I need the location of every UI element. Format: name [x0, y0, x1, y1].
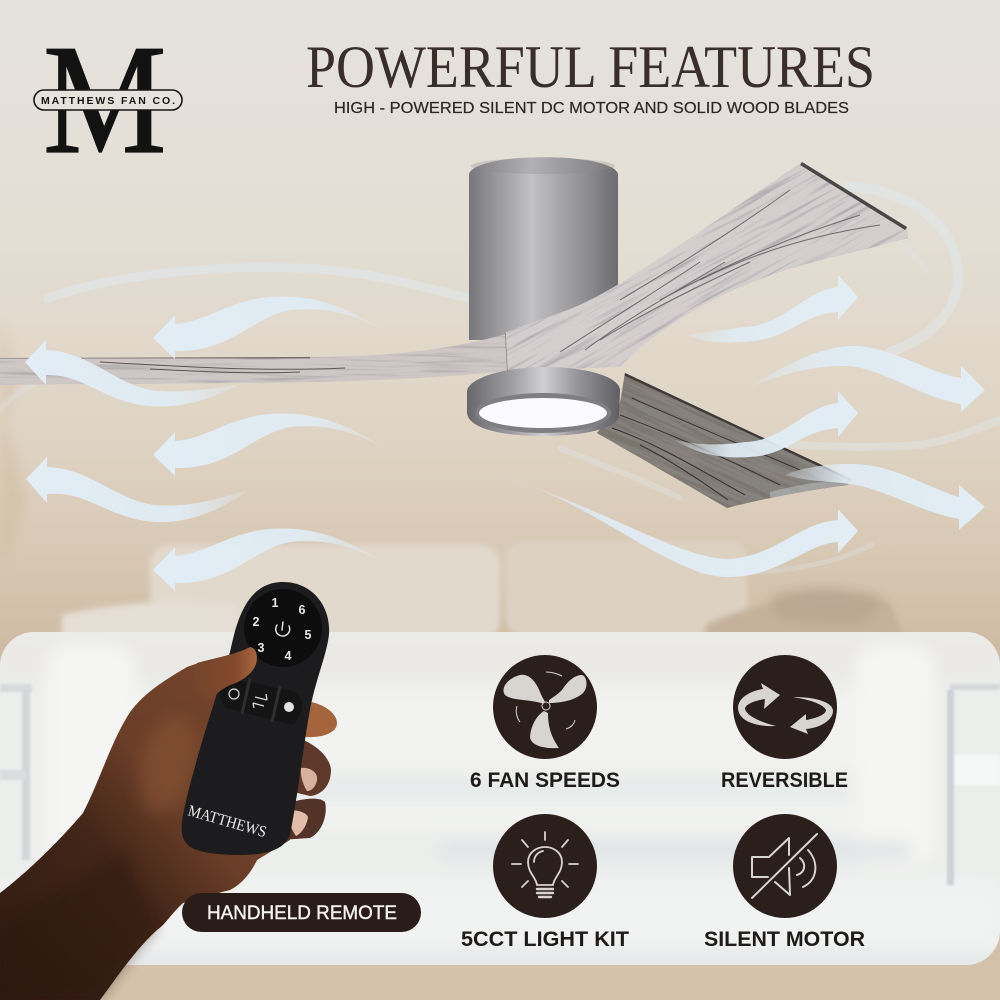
air arrow left 3 [153, 414, 382, 476]
air arrow right 4 [750, 346, 985, 412]
feature: reversible [721, 655, 848, 792]
ceiling fan [0, 44, 1000, 623]
hand: palm highlight [131, 710, 205, 820]
label: SILENT MOTOR [704, 928, 865, 951]
remote button: dim [284, 702, 294, 712]
remote number keys: 2 [253, 615, 260, 629]
label: REVERSIBLE [721, 769, 848, 792]
remote number keys [253, 596, 312, 663]
remote body [182, 582, 329, 855]
feature: 5CCT light kit [461, 814, 629, 951]
hand: finger middle [285, 738, 331, 796]
fan blade: upper pale wood [505, 162, 908, 370]
fan blade: lower dark wood [597, 373, 852, 508]
remote number keys: 4 [285, 649, 292, 663]
blurred sofa cushions [62, 541, 905, 640]
air arrow right 2 [675, 391, 858, 457]
hand: wrist shading [0, 850, 157, 1000]
label: 5CCT LIGHT KIT [461, 928, 629, 951]
logo letter M: M [43, 13, 167, 187]
remote number keys: 6 [299, 603, 306, 617]
remote keypad disc [244, 589, 322, 667]
light kit ring [467, 367, 620, 436]
air arrow right 3 [500, 476, 858, 577]
icon: muted speaker [733, 814, 837, 918]
label: 6 FAN SPEEDS [470, 769, 620, 792]
panel: frosted features panel over sofa [0, 632, 1000, 967]
remote button: light [229, 689, 239, 699]
floor strip below panel [0, 960, 1000, 1000]
hand: arm and palm [0, 647, 300, 1000]
subtitle: HIGH - POWERED SILENT DC MOTOR AND SOLID WOOD BLADES [334, 100, 849, 117]
remote brand: MATTHEWS [186, 803, 268, 841]
air arrow left 5 [153, 529, 382, 591]
remote power icon [276, 622, 290, 636]
logo name pill: MATTHEWS FAN CO. [41, 95, 175, 107]
blurred sofa inside panel [0, 632, 1000, 967]
remote button: reverse [253, 694, 267, 708]
logo: Matthews Fan Co. monogram [34, 13, 182, 187]
hand: thumb [195, 647, 257, 698]
remote control [182, 582, 329, 855]
title: POWERFUL FEATURES [306, 34, 875, 101]
remote lower buttons [219, 677, 302, 725]
label: handheld remote [182, 893, 421, 932]
hand: finger ring [280, 799, 326, 840]
fan blade: left pale wood [0, 334, 507, 385]
air arrow right 1 [687, 275, 858, 342]
logo name pill [34, 90, 182, 110]
fan canopy cylinder [469, 157, 618, 340]
air arrow left 1 [153, 297, 382, 359]
faint air swirls behind fan [0, 186, 1000, 573]
air arrow left 4 [26, 457, 248, 522]
air flow arrows [25, 275, 985, 591]
fingernail ring [287, 810, 308, 836]
icon: light bulb [493, 814, 597, 918]
feature: 6 fan speeds [470, 655, 620, 792]
remote number keys: 1 [272, 596, 279, 610]
label: handheld remote: HANDHELD REMOTE [207, 903, 397, 924]
fingernail middle [301, 768, 317, 791]
hand holding remote [0, 582, 337, 1000]
blurred table legs [0, 684, 1000, 885]
icon: fan [493, 655, 597, 759]
air arrow right 5 [785, 464, 985, 530]
air arrow left 2 [25, 340, 240, 406]
icon: rotating arrows [733, 655, 837, 759]
blurred dried plant at left edge [0, 320, 26, 560]
LED light lens [479, 398, 607, 428]
hand: finger index [305, 701, 337, 737]
feature: silent motor [704, 814, 865, 951]
blurred dark pillow [770, 588, 885, 625]
remote number keys: 3 [258, 641, 265, 655]
remote number keys: 5 [305, 628, 312, 642]
